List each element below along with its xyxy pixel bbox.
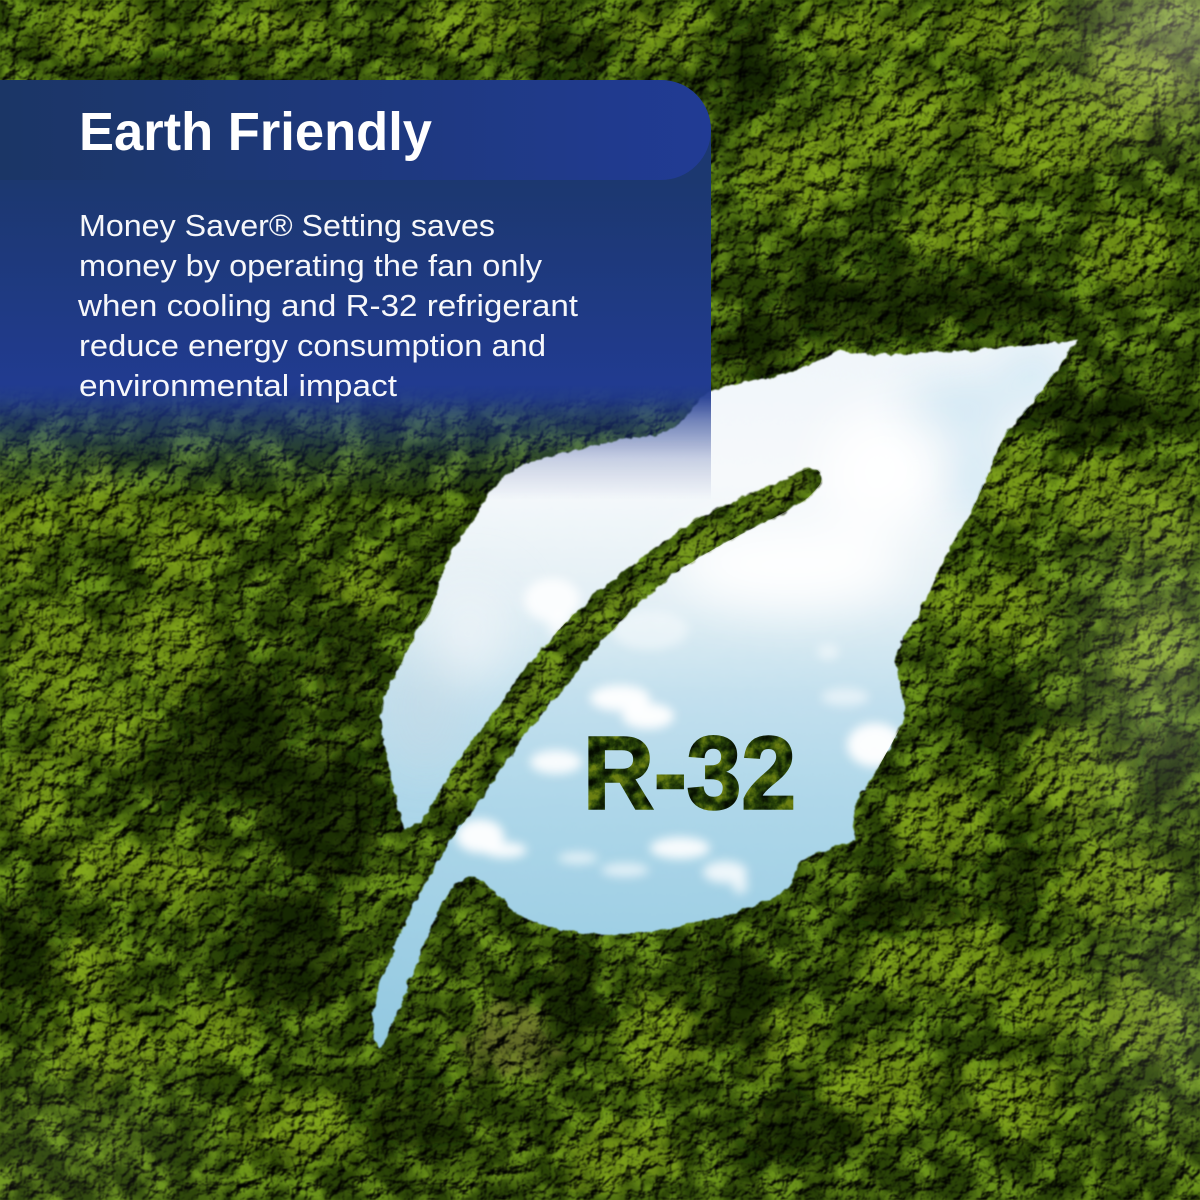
panel: blue text card	[0, 80, 711, 500]
clouds	[393, 353, 1065, 894]
body text: reduce energy consumption and	[79, 328, 546, 363]
title: Earth Friendly	[79, 102, 432, 162]
body text: Money Saver® Setting saves	[79, 208, 495, 243]
leaf-shaped lake with sky reflection	[372, 340, 1078, 1048]
body text: money by operating the fan only	[79, 248, 543, 283]
body text: when cooling and R-32 refrigerant	[77, 288, 578, 323]
leaf stem highlights	[450, 482, 800, 800]
body text: environmental impact	[79, 368, 397, 403]
R-32 text cut from forest: R-32	[583, 716, 796, 830]
heading bar	[0, 80, 711, 180]
body text	[77, 208, 578, 403]
